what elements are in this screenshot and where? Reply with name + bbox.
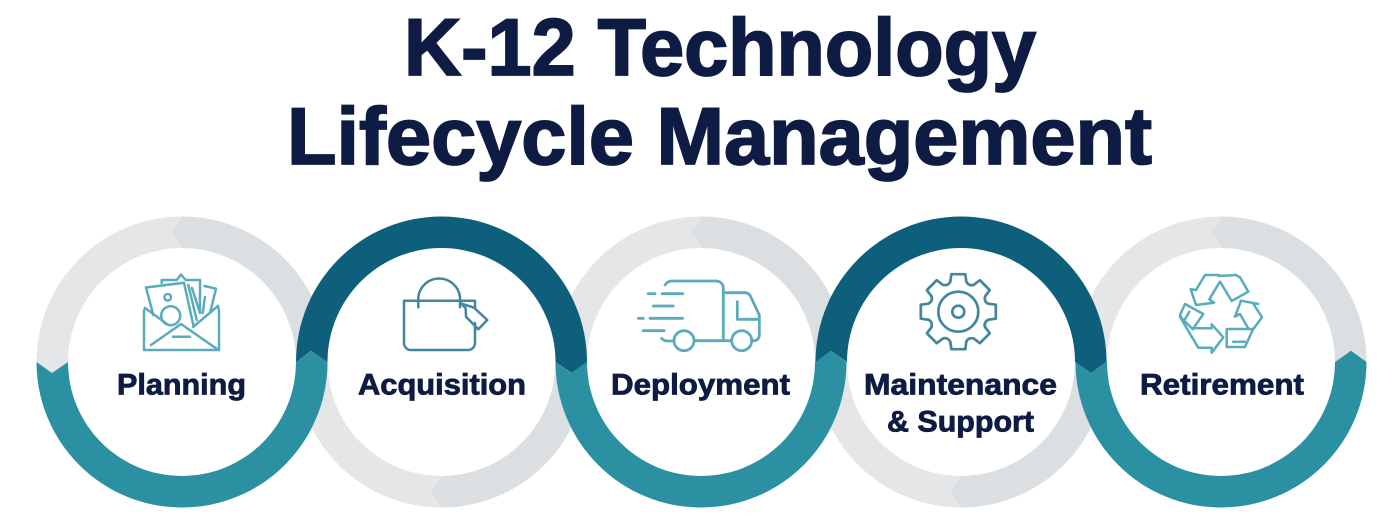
label: acquisition: Acquisition bbox=[358, 368, 526, 402]
label: maintenance and support: & Support bbox=[887, 406, 1034, 438]
icon: shopping bag with tag bbox=[404, 279, 487, 350]
title: K-12 Technology bbox=[404, 3, 1036, 93]
ring: maintenance dark arc bbox=[816, 216, 1106, 373]
panel: acquisition bbox=[296, 216, 587, 402]
panel: retirement bbox=[1076, 275, 1366, 508]
title: Lifecycle Management bbox=[287, 92, 1152, 182]
label: maintenance and support: Maintenance bbox=[864, 368, 1057, 402]
gray background rings bbox=[36, 216, 1366, 508]
icon: recycling arrows bbox=[1180, 275, 1262, 353]
label: deployment: Deployment bbox=[611, 368, 790, 402]
icon: gear bbox=[921, 274, 996, 349]
panel: planning bbox=[36, 274, 328, 508]
panel: maintenance and support bbox=[816, 216, 1106, 438]
title bbox=[287, 3, 1152, 182]
label: retirement: Retirement bbox=[1140, 368, 1304, 402]
ring: planning teal arc bbox=[36, 351, 328, 508]
ring: retirement teal arc bbox=[1076, 351, 1366, 508]
icon: money envelope bbox=[144, 274, 219, 350]
panel: deployment bbox=[556, 281, 846, 508]
label: planning: Planning bbox=[117, 368, 246, 402]
ring: deployment teal arc bbox=[556, 351, 846, 508]
icon: delivery truck bbox=[638, 281, 759, 351]
ring: acquisition dark arc bbox=[296, 216, 587, 373]
label: maintenance and support bbox=[864, 368, 1057, 438]
